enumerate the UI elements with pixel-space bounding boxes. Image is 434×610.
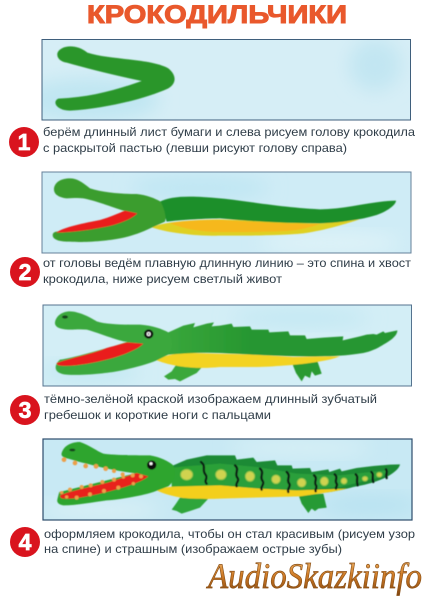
step 4 number badge [10,527,40,557]
panel background 4 [40,439,420,520]
step 2 number badge: 2 [19,259,31,285]
back leg [298,494,327,513]
nostril [69,449,75,451]
panel: step 4 [40,439,420,520]
step 2 number badge [10,257,40,287]
step 2 text: крокодила, ниже рисуем светлый живот [43,273,283,286]
step 3 text: тёмно-зелёной краской изображаем длинный зубчатый [44,393,377,406]
panel border 2 [42,172,411,253]
panel border 1 [42,40,410,120]
step 1 number badge: 1 [18,129,31,155]
nostril [62,315,68,319]
step 3 number badge: 3 [19,397,31,423]
crocodile head outline [55,46,175,111]
head and jaws [55,311,172,375]
panel border 3 [43,305,412,386]
crocodile: outline and belly [53,178,396,242]
mouth [56,211,137,233]
front leg [164,364,203,381]
belly [157,353,340,368]
step 4 text: оформляем крокодила, чтобы он стал красивым (рисуем узор [44,528,416,541]
panel background 2 [42,172,411,253]
step 2 text: от головы ведём плавную длинную линию – это спина и хвост [43,257,412,270]
panel border 4 [43,439,412,520]
panel background 1 [20,39,411,122]
step 1 text [43,126,416,155]
step 4 text: на спине) и страшным (изображаем острые зубы) [44,543,342,556]
eye [147,460,156,470]
teeth [60,457,143,500]
mouth [60,473,148,499]
eye [144,329,153,339]
step 4 number badge: 4 [19,529,32,555]
step 1 text: берём длинный лист бумаги и слева рисуем голову крокодила [43,126,416,139]
back spots [181,469,382,487]
belly [152,219,360,236]
step 3 text: гребешок и короткие ноги с пальцами [44,409,271,422]
step 1 number badge [9,127,39,157]
front leg [172,498,208,514]
title: КРОКОДИЛЬЧИКИ [87,1,347,29]
crocodile with crest and legs [55,311,397,381]
decorated crocodile [57,442,400,514]
belly [157,485,347,499]
body lighter band [172,464,387,490]
step 2 text [43,257,412,286]
body and crest [172,455,400,496]
step 1 text: с раскрытой пастью (левши рисуют голову справа) [43,142,347,155]
body [160,197,396,223]
panel background 3 [40,305,412,386]
panel: step 1 [20,39,411,122]
step 3 text [44,393,377,422]
head and jaws [57,442,175,505]
step 4 text [44,528,416,556]
panel: step 2 [42,172,411,253]
mouth [57,342,143,366]
head and jaws [53,178,166,242]
panel: step 3 [40,305,412,386]
back leg [293,359,322,381]
step 3 number badge [10,395,40,425]
body and crest [168,322,397,356]
back stripes [201,462,387,492]
belly orange centre [170,220,320,232]
